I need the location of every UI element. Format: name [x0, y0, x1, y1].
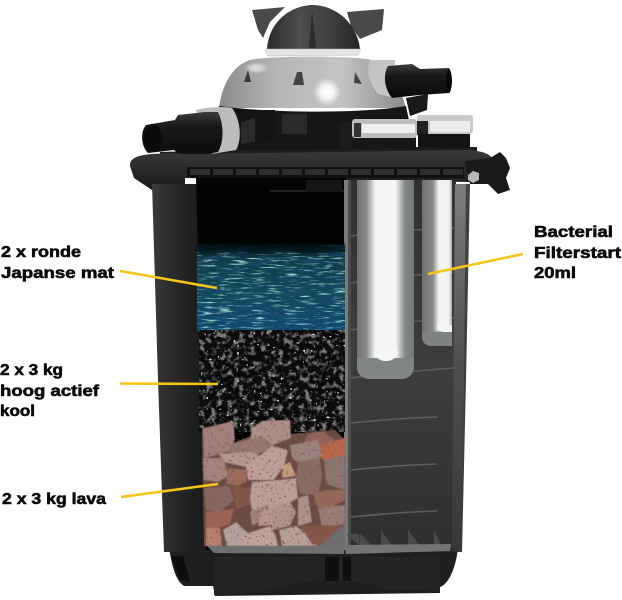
leader: Japanse mat [120, 271, 217, 288]
label: 2 x ronde Japanse mat [1, 244, 115, 282]
label: 2 x ronde Japanse mat: Japanse mat [1, 265, 115, 282]
dome cap [265, 5, 361, 56]
outlet hose right [368, 60, 452, 116]
label: 2 x 3 kg hoog actief kool: kool [0, 403, 35, 420]
label: Bacterial Filterstart 20ml: 20ml [534, 265, 576, 282]
label: 2 x 3 kg lava: 2 x 3 kg lava [2, 491, 106, 508]
clamp knob [465, 152, 510, 194]
lid plate [160, 147, 477, 170]
lid [130, 150, 494, 193]
label: Bacterial Filterstart 20ml [534, 224, 622, 282]
leader: lava [121, 484, 218, 497]
leader: actief kool [120, 382, 218, 385]
tube left [357, 180, 414, 379]
layer: active carbon [199, 330, 345, 432]
layer: Japanese mat [197, 243, 345, 331]
leader: Bacterial Filterstart [428, 254, 523, 274]
sight glasses [340, 115, 473, 149]
label: 2 x ronde Japanse mat: 2 x ronde [1, 244, 81, 261]
label: 2 x 3 kg hoog actief kool [0, 362, 100, 420]
cut-away window [196, 178, 346, 550]
label: 2 x 3 kg hoog actief kool: hoog actief [0, 383, 100, 400]
label: Bacterial Filterstart 20ml: Filterstart [534, 245, 622, 262]
inlet hose left [142, 107, 307, 155]
top handle [252, 7, 384, 39]
label: 2 x 3 kg hoog actief kool: 2 x 3 kg [0, 362, 63, 379]
base feet [169, 548, 458, 596]
layer: lava rocks [202, 420, 345, 554]
right chamber [344, 180, 466, 554]
tube right [422, 180, 452, 346]
bacterial starter tubes [357, 180, 452, 379]
grey housing [215, 57, 416, 152]
label: Bacterial Filterstart 20ml: Bacterial [534, 224, 613, 241]
filter body [152, 184, 470, 552]
